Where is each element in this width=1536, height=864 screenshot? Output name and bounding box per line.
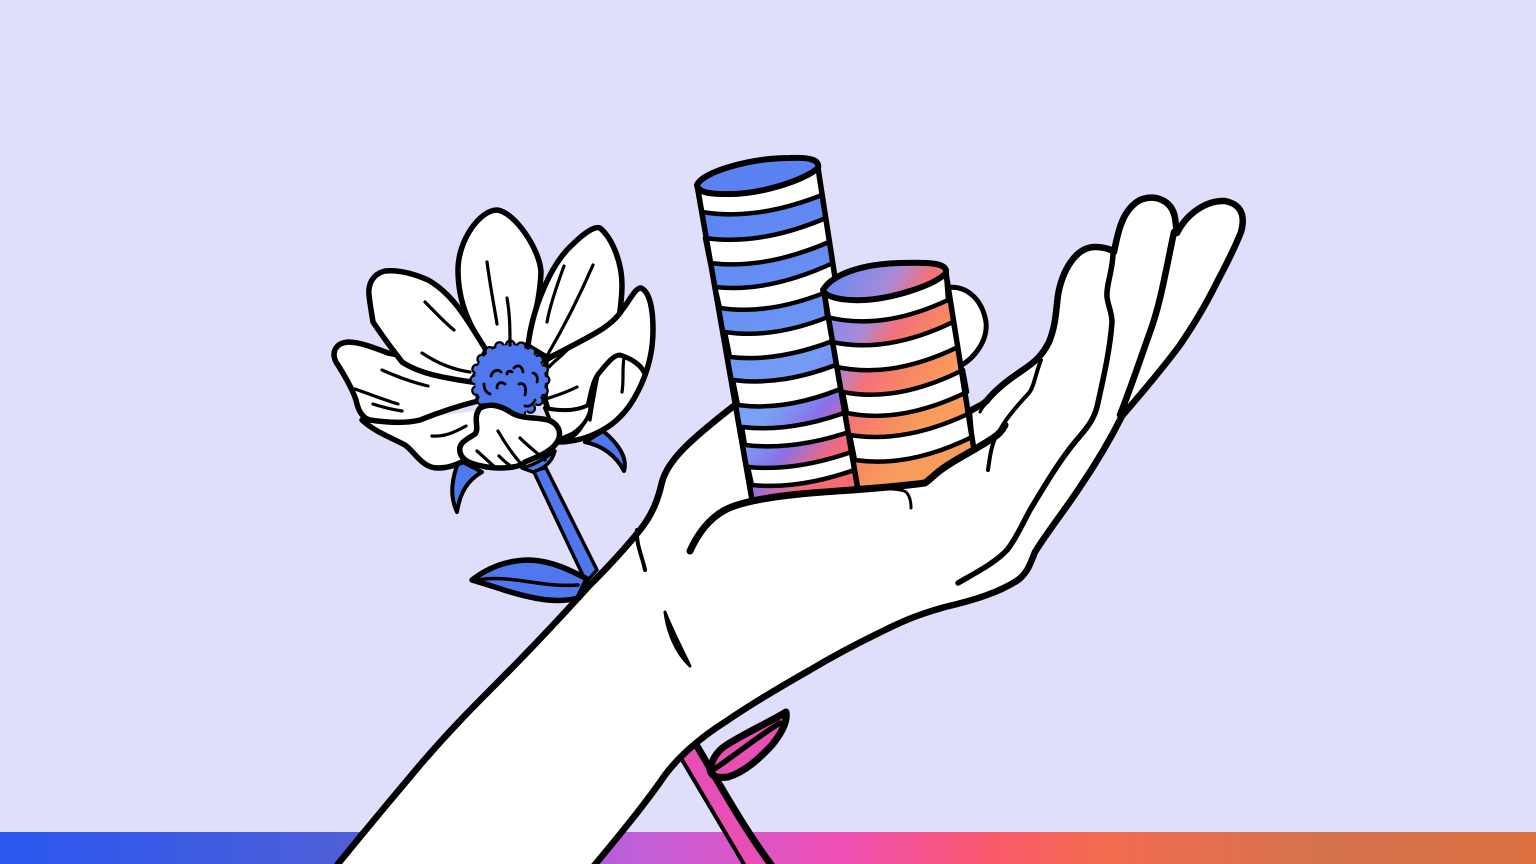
tall stack body <box>697 168 868 500</box>
front petal fold <box>460 405 560 468</box>
pink leaf <box>710 712 786 777</box>
tall stack edges <box>697 168 868 500</box>
palm thumb crease <box>855 488 911 508</box>
flower <box>334 210 653 600</box>
top centre petal <box>458 210 541 350</box>
blue under-flower band <box>522 451 555 472</box>
short stack white bands <box>824 274 972 462</box>
pink stem <box>680 712 786 864</box>
front palm <box>690 425 1010 620</box>
rear finger behind coins <box>940 287 986 366</box>
right petal fold <box>558 355 644 442</box>
flower centre <box>475 345 545 415</box>
upper left petal <box>369 271 486 382</box>
short stack body <box>823 273 978 505</box>
palm crease <box>690 425 1005 551</box>
tall stack white bands <box>698 168 860 486</box>
top right petal <box>528 228 622 358</box>
right sepal <box>585 431 625 471</box>
tall stack top ellipse <box>697 158 818 194</box>
right petal lower sliver <box>545 404 590 440</box>
short coin stack <box>823 263 978 505</box>
hand detail lines <box>637 232 1174 666</box>
left petal <box>334 342 480 422</box>
tall coin stack <box>697 158 868 500</box>
left sepal <box>452 460 482 512</box>
short stack top ellipse <box>823 263 946 300</box>
gradient bottom bar <box>0 832 1536 864</box>
lower left petal <box>362 410 480 468</box>
short stack edges <box>824 273 974 490</box>
petal detail lines <box>355 262 624 468</box>
right petal <box>545 288 653 442</box>
hand and arm silhouette <box>330 198 1243 864</box>
flower leaf <box>472 560 587 600</box>
flower stem <box>533 468 597 582</box>
